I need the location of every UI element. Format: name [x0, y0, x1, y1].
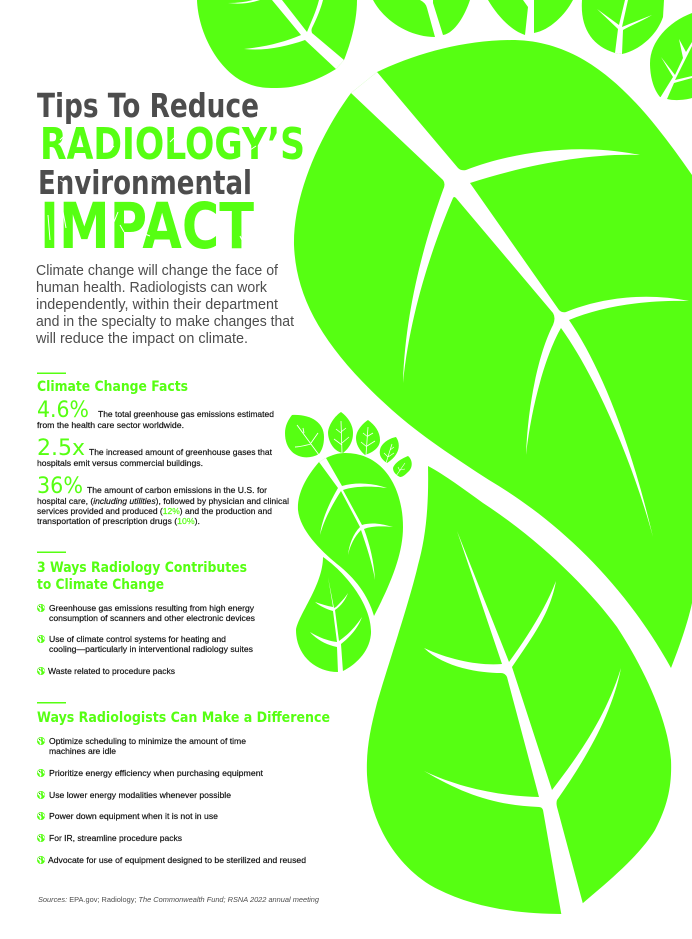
panel: climate change facts [37, 372, 289, 526]
fact: 36%: The amount of carbon emissions in the U.S. for [87, 485, 267, 495]
intro paragraph: human health. Radiologists can work [36, 279, 267, 296]
bullet: climate control [37, 634, 253, 654]
bullet: climate control: Use of climate control systems for heating and [49, 634, 226, 644]
bullet: power down: Power down equipment when it is not in use [49, 811, 218, 821]
panel: ways radiologists can make a difference [37, 702, 330, 865]
sources: Sources: EPA.gov; Radiology; The Commonwealth Fund; RSNA 2022 annual meeting [38, 895, 319, 904]
intro paragraph: Climate change will change the face of [36, 262, 279, 279]
small foot: toe 1 [285, 415, 324, 457]
fact: 36%: services provided and produced (12%) and the production and [37, 506, 272, 516]
bullet: procedure packs: For IR, streamline procedure packs [49, 833, 182, 843]
heading: 3 ways: 3 Ways Radiology Contributes [37, 560, 247, 576]
bullet: scheduling: Optimize scheduling to minimize the amount of time [49, 736, 246, 746]
bullet: emissions: consumption of scanners and other electronic devices [49, 613, 255, 623]
bullet: scheduling: machines are idle [49, 746, 116, 756]
heading: 3 ways: to Climate Change [37, 577, 164, 593]
small foot: toe 3 [356, 420, 380, 455]
small foot: toe 5 [393, 456, 412, 477]
fact: 2.5x: The increased amount of greenhouse gases that [89, 447, 273, 457]
big foot: toe leaf 5 [650, 13, 692, 100]
intro paragraph: and in the specialty to make changes that [36, 313, 295, 330]
fact: 4.6%: from the health care sector worldwide. [37, 420, 184, 430]
bullet: waste: Waste related to procedure packs [48, 666, 175, 676]
title: RADIOLOGY’S [40, 119, 305, 170]
title [37, 86, 305, 263]
fact: 36%: 36% [37, 474, 83, 499]
bullet: emissions [37, 603, 255, 623]
big foot: toe leaf 4 [582, 0, 664, 54]
bullet: reuse: Advocate for use of equipment designed to be sterilized and reused [48, 855, 306, 865]
intro paragraph [35, 262, 295, 347]
big footprint [197, 0, 692, 925]
small foot: toe 2 [328, 412, 353, 453]
small foot: heel leaf [296, 557, 371, 673]
big foot: toe leaf 2 [373, 0, 470, 37]
small foot: toe 4 [380, 437, 399, 463]
fact: 36% [37, 474, 289, 526]
title: Environmental [38, 163, 252, 202]
intro paragraph: will reduce the impact on climate. [35, 330, 248, 347]
heading: 3 ways [37, 560, 247, 593]
big foot: big toe leaf [197, 0, 357, 88]
bullet: modalities: Use lower energy modalities whenever possible [49, 790, 231, 800]
big foot: toe leaf 3 [488, 0, 573, 35]
big foot: heel leaf [367, 466, 671, 925]
fact: 4.6% [37, 398, 274, 430]
title: Tips To Reduce [37, 86, 259, 125]
big foot: sole leaf [294, 40, 692, 668]
bullet: climate control: cooling—particularly in interventional radiology suites [49, 644, 253, 654]
bullet: scheduling [37, 736, 246, 756]
fact: 2.5x [37, 436, 273, 468]
title: IMPACT [40, 190, 254, 263]
bullet: emissions: Greenhouse gas emissions resulting from high energy [49, 603, 255, 613]
small footprint [285, 412, 412, 673]
fact: 2.5x: hospitals emit versus commercial buildings. [37, 458, 203, 468]
panel: 3 ways radiology contributes [37, 552, 255, 676]
heading: climate change facts: Climate Change Facts [37, 379, 188, 395]
bullet: efficiency: Prioritize energy efficiency when purchasing equipment [49, 768, 264, 778]
intro paragraph: independently, within their department [36, 296, 279, 313]
fact: 2.5x: 2.5x [37, 436, 85, 461]
fact: 36%: transportation of prescription drugs ( 10%). [37, 516, 200, 526]
fact: 4.6%: The total greenhouse gas emissions estimated [98, 409, 274, 419]
fact: 36%: hospital care, (including utilities), followed by physician and clinical [37, 496, 289, 506]
heading: ways radiologists: Ways Radiologists Can Make a Difference [37, 710, 330, 726]
small foot: sole leaf [298, 453, 403, 616]
fact: 4.6%: 4.6% [37, 398, 89, 423]
